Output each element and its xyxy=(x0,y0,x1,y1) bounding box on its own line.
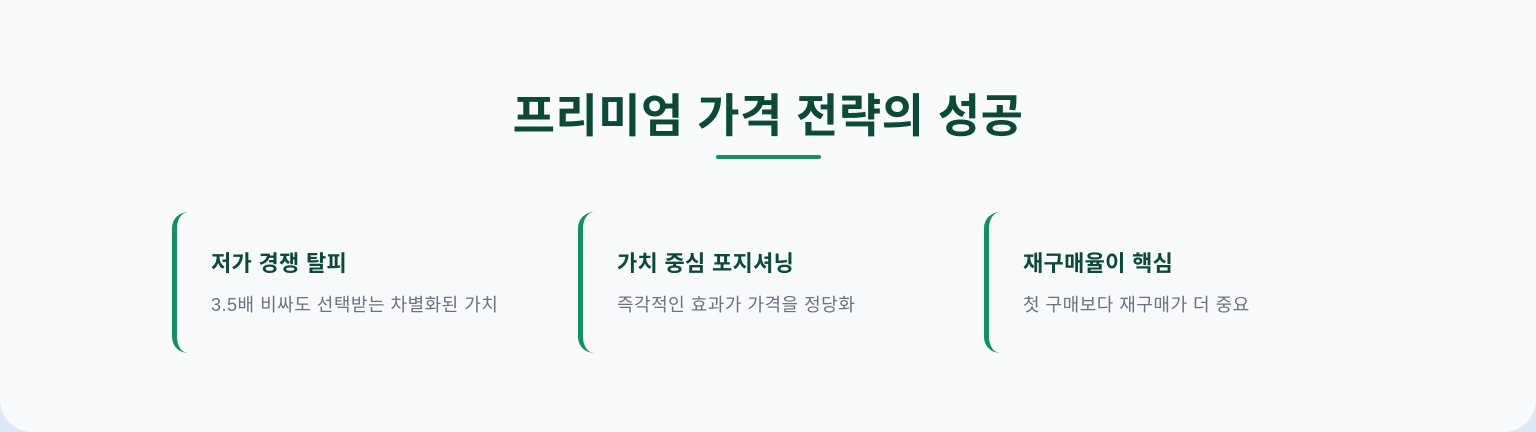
card heading: 가치 중심 포지셔닝 xyxy=(617,251,794,276)
card: low-price escape xyxy=(172,212,545,353)
card heading: 저가 경쟁 탈피 xyxy=(211,251,347,276)
title underline xyxy=(716,155,821,159)
card text: 첫 구매보다 재구매가 더 중요 xyxy=(1023,295,1250,315)
card text: 즉각적인 효과가 가격을 정당화 xyxy=(617,295,855,315)
card: value positioning xyxy=(578,212,951,353)
card text: 3.5배 비싸도 선택받는 차별화된 가치 xyxy=(211,295,498,315)
card: repurchase xyxy=(984,212,1357,353)
card heading: 재구매율이 핵심 xyxy=(1023,251,1173,276)
title: 프리미엄 가격 전략의 성공 xyxy=(513,90,1023,142)
